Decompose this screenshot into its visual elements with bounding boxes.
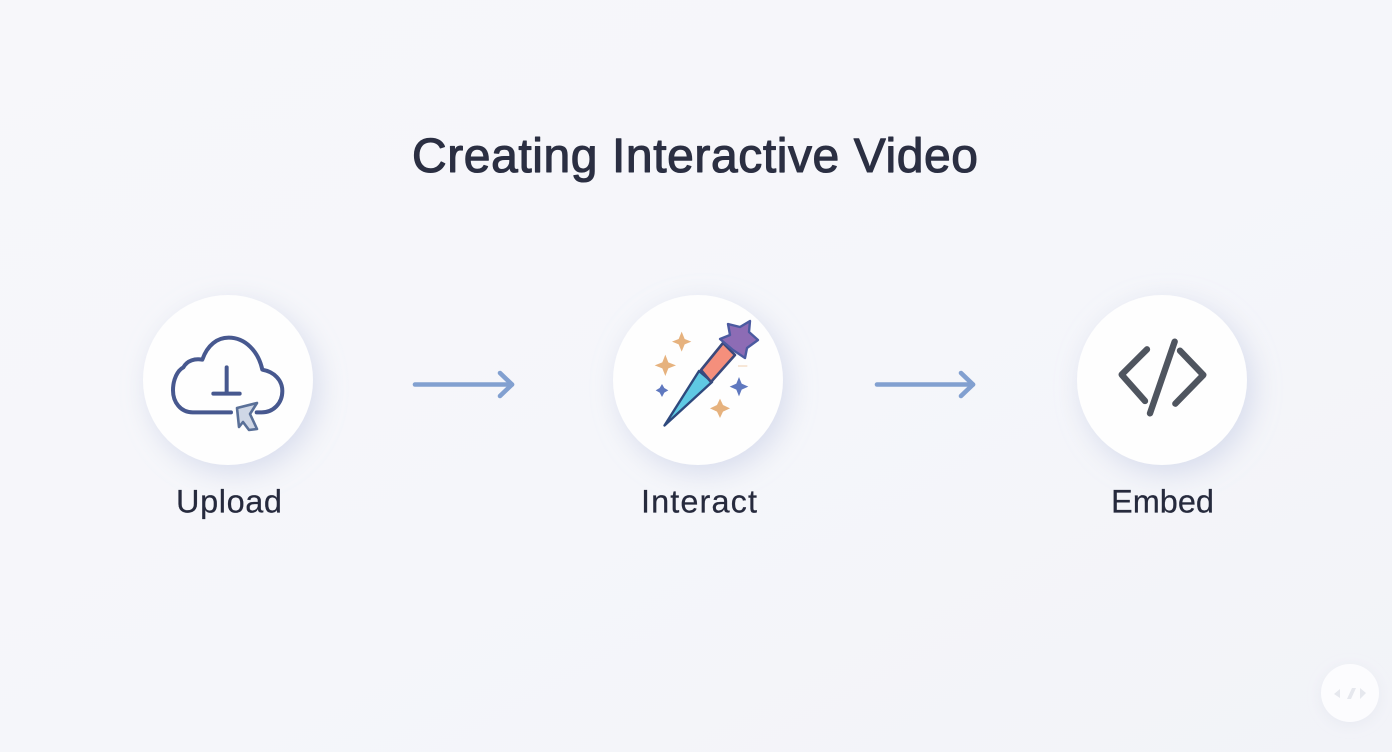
arrow: interact to embed bbox=[877, 373, 973, 396]
step 2: interact bbox=[613, 295, 783, 520]
icon: code brackets bbox=[1122, 342, 1203, 413]
embed circle bbox=[1077, 295, 1247, 465]
icon: magic wand with sparkles bbox=[655, 321, 758, 426]
wand body bbox=[701, 343, 735, 382]
icon: cloud upload with cursor bbox=[173, 338, 282, 430]
title: Creating Interactive Video bbox=[412, 130, 978, 183]
interact circle bbox=[613, 295, 783, 465]
wand star bbox=[720, 321, 758, 358]
upload circle bbox=[143, 295, 313, 465]
label: interact: Interact bbox=[641, 484, 757, 520]
step 3: embed bbox=[1077, 295, 1247, 520]
sparkles bbox=[655, 332, 748, 418]
wand tip bbox=[664, 371, 712, 426]
badge code glyph bbox=[1334, 688, 1366, 699]
label: embed: Embed bbox=[1111, 484, 1214, 520]
arrow: upload to interact bbox=[415, 373, 512, 396]
label: upload: Upload bbox=[176, 484, 282, 520]
watermark badge bbox=[1321, 664, 1379, 722]
step 1: upload bbox=[143, 295, 313, 520]
